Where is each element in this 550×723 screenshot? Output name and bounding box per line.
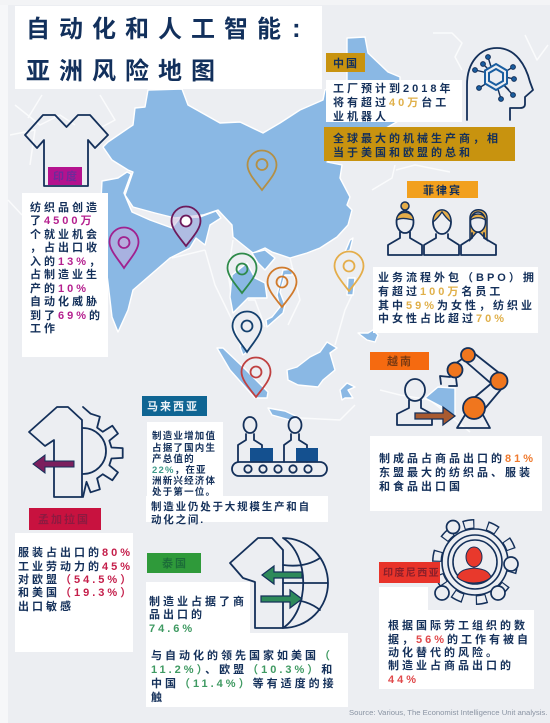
panel: China <box>324 48 533 161</box>
label: China <box>326 53 365 72</box>
label: Vietnam: 越南 <box>387 354 413 368</box>
map of Asia <box>8 33 548 432</box>
text block: China robots <box>326 80 462 123</box>
label: China: 中国 <box>333 56 359 70</box>
text block: India textiles: 产的10% <box>30 281 89 295</box>
icon: robot arm replacing worker <box>397 348 508 428</box>
text block: China robots: 业机器人 <box>333 109 389 123</box>
text block: Indonesia risk: 制造业占商品出口的 <box>388 658 514 672</box>
panel: Bangladesh <box>15 407 134 652</box>
pin: China <box>248 150 276 190</box>
text block: Thailand exports: 制造业占据了商 <box>149 594 247 608</box>
label: Philippines: 菲律宾 <box>423 183 462 197</box>
callout: China machinery: 全球最大的机械生产商，相 <box>333 131 501 145</box>
panel: India <box>22 115 108 357</box>
source note: Source: Various, The Economist Intelligence Unit analysis. <box>349 708 547 717</box>
text block: Thailand exports <box>146 582 348 707</box>
label: Bangladesh <box>29 508 101 530</box>
label: Philippines <box>407 181 478 198</box>
label: Bangladesh: 孟加拉国 <box>38 512 90 526</box>
pin: Bangladesh <box>172 206 200 246</box>
text block: Malaysia value added: 产总值的 <box>152 453 195 465</box>
Southeast Asia <box>252 250 275 270</box>
pin: India <box>110 228 138 268</box>
text block: Vietnam exports: 和食品出口国 <box>379 479 463 493</box>
text block: Thailand exports: 中国（11.4%）等有适度的接 <box>151 676 337 690</box>
label: India: 印度 <box>53 169 79 183</box>
pin: Indonesia <box>242 358 270 397</box>
text block: Malaysia value added: 占据了国内生 <box>152 442 216 454</box>
text block: Malaysia value added <box>147 422 223 498</box>
text block: India textiles: 占制造业生 <box>30 267 100 281</box>
text block: Bangladesh apparel: 出口敏感 <box>18 599 74 613</box>
panel: Thailand <box>146 538 348 707</box>
label: Malaysia: 马来西亚 <box>147 399 199 413</box>
label: Indonesia: 印度尼西亚 <box>383 566 440 579</box>
text block: India textiles: ，占出口收 <box>30 240 100 254</box>
icon: shirt and globe <box>230 538 328 628</box>
text block: Thailand exports: 与自动化的领先国家如美国（ <box>151 648 333 662</box>
title: : <box>292 13 310 43</box>
panel: Vietnam <box>370 348 542 511</box>
text block: Malaysia value added: 处于第一位。 <box>152 486 216 498</box>
text block: India textiles: 了4500万 <box>30 214 94 227</box>
text block: Bangladesh apparel: 对欧盟（54.5%） <box>18 572 134 586</box>
panel: Malaysia <box>142 396 328 526</box>
text block: Thailand exports: 品出口的 <box>149 607 205 621</box>
text block: Bangladesh apparel <box>15 533 134 652</box>
icon: workers at conveyor <box>232 417 327 476</box>
text block: Thailand exports: 11.2%）、欧盟（10.3%）和 <box>151 662 335 676</box>
text block: India textiles: 个就业机会 <box>30 227 100 241</box>
China <box>103 37 400 258</box>
text block: India textiles: 到了69%的 <box>30 308 103 322</box>
text block: Vietnam exports: 东盟最大的纺织品、服装 <box>379 465 533 479</box>
text block: Malaysia value added: 22%，在亚 <box>152 464 207 476</box>
text block: Philippines BPO: 有超过100万名员工 <box>378 284 503 298</box>
label: Thailand: 泰国 <box>162 556 188 570</box>
icon: T-shirt <box>25 115 108 186</box>
label: Indonesia <box>379 562 440 583</box>
text block: Indonesia risk: 动化替代的风险。 <box>388 645 500 659</box>
text block: China robots: 工厂预计到2018年 <box>333 81 453 95</box>
pin: Philippines <box>334 252 364 291</box>
callout: China machinery <box>324 127 515 161</box>
label: Malaysia <box>142 396 207 416</box>
text block: Philippines BPO: 中女性占比超过70% <box>378 311 507 325</box>
label: India <box>48 167 82 185</box>
label: Vietnam <box>370 352 429 370</box>
icon: three women <box>388 202 496 255</box>
text block: India textiles: 自动化威胁 <box>30 294 100 308</box>
text block: Indonesia risk: 44% <box>388 674 419 686</box>
text block: India textiles <box>22 193 108 357</box>
text block: Thailand exports: 74.6% <box>149 623 195 635</box>
text block: Malaysia value added: 洲新兴经济体 <box>152 475 216 487</box>
icon: AI head <box>467 48 533 120</box>
text block: Vietnam exports <box>370 436 542 511</box>
text block: Bangladesh apparel: 服装占出口的80% <box>18 545 133 559</box>
text block: Bangladesh apparel: 工业劳动力的45% <box>18 559 133 573</box>
text block: Thailand exports: 触 <box>151 690 165 704</box>
pin: Malaysia <box>232 312 262 352</box>
text block: India textiles: 工作 <box>30 321 58 335</box>
panel: Philippines <box>373 181 538 333</box>
text block: Vietnam exports: 制成品占商品出口的81% <box>379 451 536 465</box>
text block: Philippines BPO: 业务流程外包（BPO）拥 <box>378 270 537 284</box>
icon: shirt and gear <box>29 407 123 497</box>
text block: China robots: 将有超过40万台工 <box>333 95 449 109</box>
text block: Indonesia risk: 据，56%的工作有被自 <box>388 632 531 646</box>
icon: gear with person <box>435 520 518 600</box>
text block: Indonesia risk: 根据国际劳工组织的数 <box>388 618 528 632</box>
text block: India textiles: 入的13%， <box>30 254 103 268</box>
callout: China machinery: 当于美国和欧盟的总和 <box>333 145 473 159</box>
text block: Philippines BPO <box>373 267 538 333</box>
text block: Malaysia value added: 制造业增加值 <box>152 430 216 442</box>
text block: India textiles: 纺织品创造 <box>30 200 100 214</box>
text block: Philippines BPO: 其中59%为女性，纺织业 <box>378 298 535 312</box>
text block: Bangladesh apparel: 和美国（19.3%） <box>18 585 134 599</box>
pin: Vietnam <box>268 268 296 307</box>
text block: Malaysia automation: 制造业仍处于大规模生产和自 <box>151 500 311 513</box>
label: Thailand <box>147 553 201 573</box>
text block: Malaysia automation: 动化之间. <box>151 513 205 526</box>
India <box>100 172 221 332</box>
title: 自动化和人工智能 <box>26 16 290 43</box>
title <box>15 6 322 89</box>
panel: Indonesia <box>379 520 534 689</box>
text block: Indonesia risk <box>379 587 534 689</box>
pin: Thailand <box>228 254 256 293</box>
title: 亚洲风险地图 <box>26 58 224 85</box>
text block: Malaysia automation <box>146 496 328 526</box>
